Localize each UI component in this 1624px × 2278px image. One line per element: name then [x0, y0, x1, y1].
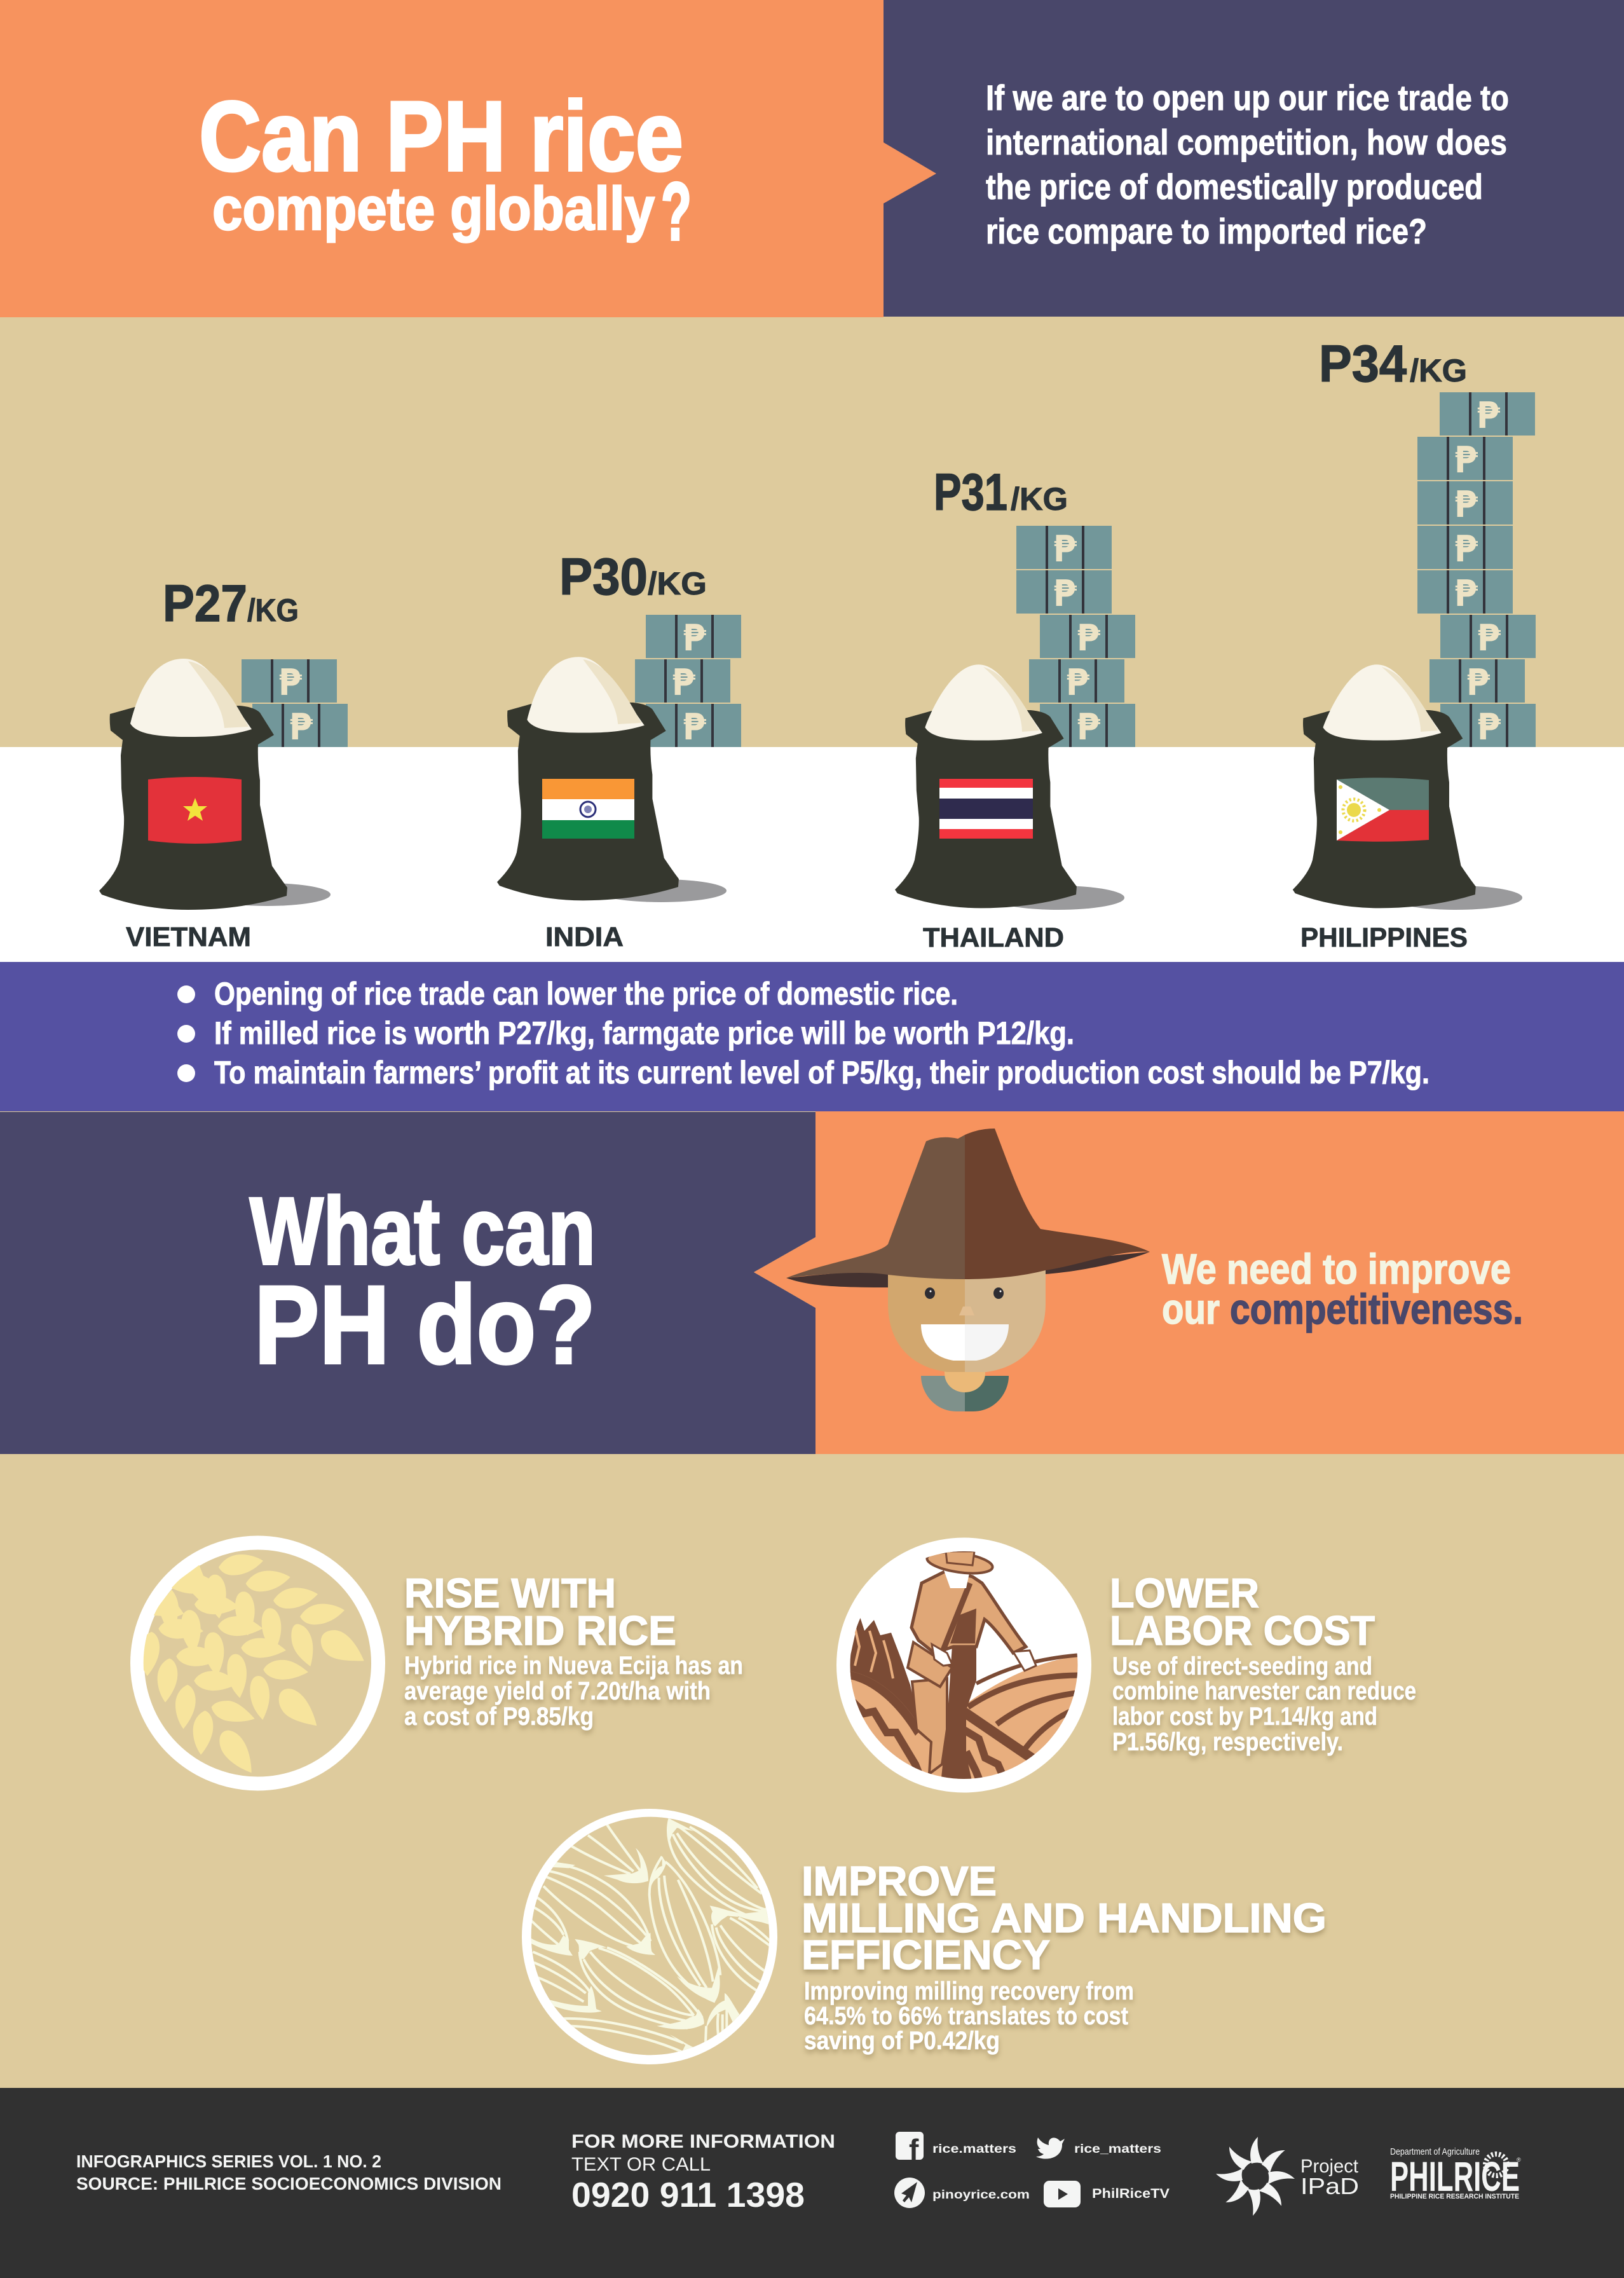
text: rise with hybrid rice: HYBRID RICE: [404, 1607, 676, 1654]
money stack: Thailand: ₱: [1066, 662, 1089, 704]
money stack: Philippines: ₱: [1477, 617, 1501, 659]
price labels: [163, 335, 1467, 633]
footer source text: INFOGRAPHICS SERIES VOL. 1 NO. 2: [76, 2151, 381, 2171]
text: improve milling: MILLING AND HANDLING: [802, 1895, 1327, 1941]
money stack: Thailand: ₱: [1053, 573, 1077, 615]
logo: PhilRice: PHILRICE: [1390, 2153, 1520, 2200]
country labels: INDIA: [545, 922, 624, 952]
bullet list: [177, 976, 1430, 1090]
sack: Philippines: [1293, 664, 1522, 910]
icon: website: [894, 2178, 925, 2208]
white floor band: [0, 747, 1624, 962]
text: improve milling: 64.5% to 66% translates to cost: [804, 2002, 1128, 2030]
text: rise with hybrid rice: [404, 1570, 743, 1731]
country labels: VIETNAM: [126, 922, 251, 952]
money stack: Thailand: ₱: [1077, 706, 1100, 748]
price labels: P27: [163, 575, 247, 633]
callout: improve competitiveness: our: [1162, 1286, 1220, 1333]
money stack: India: ₱: [683, 706, 706, 748]
price labels: /KG: [247, 593, 299, 628]
price labels: P34: [1319, 335, 1407, 393]
money stack: Vietnam: [242, 659, 348, 748]
heading: what can PH do: PH do?: [254, 1263, 596, 1387]
panel: tan solutions background: [0, 1454, 1624, 2088]
money stack: Philippines: ₱: [1454, 528, 1478, 570]
country labels: [126, 922, 1468, 953]
sack: Thailand: [895, 664, 1124, 910]
panel: footer: [0, 2088, 1624, 2278]
footer contact: 0920 911 1398: [571, 2175, 805, 2214]
text: lower labor cost: LOWER: [1110, 1570, 1259, 1616]
price labels: P31: [934, 463, 1007, 521]
money stack: Philippines: [1417, 392, 1536, 748]
text: lower labor cost: Use of direct-seeding and: [1112, 1652, 1372, 1680]
text: lower labor cost: P1.56/kg, respectively.: [1112, 1728, 1343, 1756]
logo: PhilRice: ®: [1517, 2157, 1521, 2163]
callout: improve competitiveness: [1162, 1245, 1523, 1333]
logo: PhilRice: Department of Agriculture: [1390, 2146, 1480, 2157]
money stack: Thailand: ₱: [1077, 617, 1100, 659]
footer contact: [571, 2131, 835, 2214]
icon: milling grains circle: [522, 1809, 777, 2064]
money stack: Thailand: [1016, 526, 1135, 748]
icon: facebook: [896, 2132, 924, 2166]
country labels: THAILAND: [923, 923, 1064, 953]
icon: farmer head: [786, 1129, 1150, 1411]
text: improve milling: EFFICIENCY: [802, 1931, 1050, 1978]
footer contact: FOR MORE INFORMATION: [571, 2131, 835, 2152]
text: improve milling: IMPROVE: [802, 1858, 997, 1904]
callout: improve competitiveness: competitiveness.: [1230, 1286, 1523, 1333]
country labels: PHILIPPINES: [1300, 923, 1468, 953]
logo: Project IPaD: IPaD: [1300, 2173, 1359, 2199]
panel: orange competitiveness: [754, 1111, 1624, 1454]
website address: pinoyrice.com: [932, 2188, 1030, 2202]
price labels: /KG: [1011, 481, 1068, 517]
text: lower labor cost: combine harvester can reduce: [1112, 1677, 1416, 1705]
panel: purple bullet band: [0, 962, 1624, 1111]
background: tan price panel: [0, 317, 1624, 748]
text: lower labor cost: labor cost by P1.14/kg and: [1112, 1703, 1377, 1731]
callout: improve competitiveness: We need to improve: [1162, 1245, 1511, 1293]
money stack: Thailand: ₱: [1053, 528, 1077, 570]
icon: hybrid rice circle: [137, 1542, 414, 1784]
money stack: India: ₱: [683, 617, 706, 659]
money stack: Philippines: ₱: [1477, 395, 1500, 437]
text: rise with hybrid rice: Hybrid rice in Nueva Ecija has an: [404, 1652, 743, 1680]
sack: Vietnam: [99, 659, 331, 910]
panel: question navy: [884, 0, 1624, 317]
money stack: Philippines: ₱: [1477, 706, 1501, 748]
title: [199, 81, 692, 257]
heading: what can PH do: What can: [250, 1177, 596, 1284]
money stack: Philippines: ₱: [1454, 573, 1478, 615]
sack: India: [497, 657, 727, 902]
money stack: Vietnam: ₱: [278, 662, 302, 704]
text: improve milling: saving of P0.42/kg: [804, 2027, 1000, 2055]
question text: [986, 78, 1509, 251]
title: compete globally: [212, 175, 655, 243]
money stack: Philippines: ₱: [1454, 484, 1478, 526]
icon: farmer sowing circle: [836, 1537, 1091, 1793]
bullet list: To maintain farmers’ profit at its current level of P5/kg, their production cost should be P7/kg.: [214, 1055, 1430, 1090]
text: rise with hybrid rice: a cost of P9.85/kg: [404, 1703, 594, 1731]
bullet list: Opening of rice trade can lower the price of domestic rice.: [214, 976, 958, 1012]
text: lower labor cost: LABOR COST: [1110, 1607, 1375, 1654]
text: lower labor cost: [1110, 1570, 1416, 1756]
logo: Project IPaD: Project: [1300, 2156, 1359, 2177]
text: improve milling: [802, 1858, 1327, 2055]
icon: twitter: [1036, 2137, 1065, 2159]
question text: the price of domestically produced: [986, 167, 1483, 207]
logo: Project IPaD: [1216, 2137, 1359, 2216]
logo: PhilRice: [1390, 2146, 1521, 2200]
footer source text: SOURCE: PHILRICE SOCIOECONOMICS DIVISION: [76, 2174, 502, 2193]
panel: what can PH do navy: [0, 1112, 815, 1455]
twitter handle: rice_matters: [1074, 2143, 1161, 2156]
money stack: Vietnam: ₱: [289, 706, 313, 748]
price labels: P30: [559, 548, 648, 606]
money stack: India: ₱: [672, 662, 695, 704]
bullet list: If milled rice is worth P27/kg, farmgate price will be worth P12/kg.: [214, 1015, 1074, 1051]
footer contact: TEXT OR CALL: [571, 2154, 711, 2175]
text: rise with hybrid rice: RISE WITH: [404, 1570, 616, 1616]
money stack: India: [635, 615, 741, 748]
facebook handle: rice.matters: [932, 2143, 1016, 2156]
money stack: Philippines: ₱: [1466, 662, 1490, 704]
title: ?: [661, 166, 692, 257]
text: improve milling: Improving milling recovery from: [804, 1977, 1134, 2005]
title: Can PH rice: [199, 81, 683, 192]
youtube channel: PhilRiceTV: [1092, 2186, 1170, 2201]
icon: youtube: [1044, 2181, 1081, 2207]
money stack: Philippines: ₱: [1454, 439, 1478, 481]
panel: title orange: [0, 0, 936, 317]
price labels: /KG: [648, 566, 707, 601]
question text: international competition, how does: [986, 122, 1507, 162]
heading: what can PH do: [250, 1177, 596, 1387]
question text: rice compare to imported rice?: [986, 211, 1427, 251]
footer source text: [76, 2151, 502, 2193]
question text: If we are to open up our rice trade to: [986, 78, 1509, 118]
text: rise with hybrid rice: average yield of 7.20t/ha with: [404, 1677, 711, 1705]
logo: PhilRice: PHILIPPINE RICE RESEARCH INSTITUTE: [1390, 2193, 1519, 2200]
icon: facebook: f: [909, 2133, 919, 2166]
price labels: /KG: [1410, 353, 1467, 388]
